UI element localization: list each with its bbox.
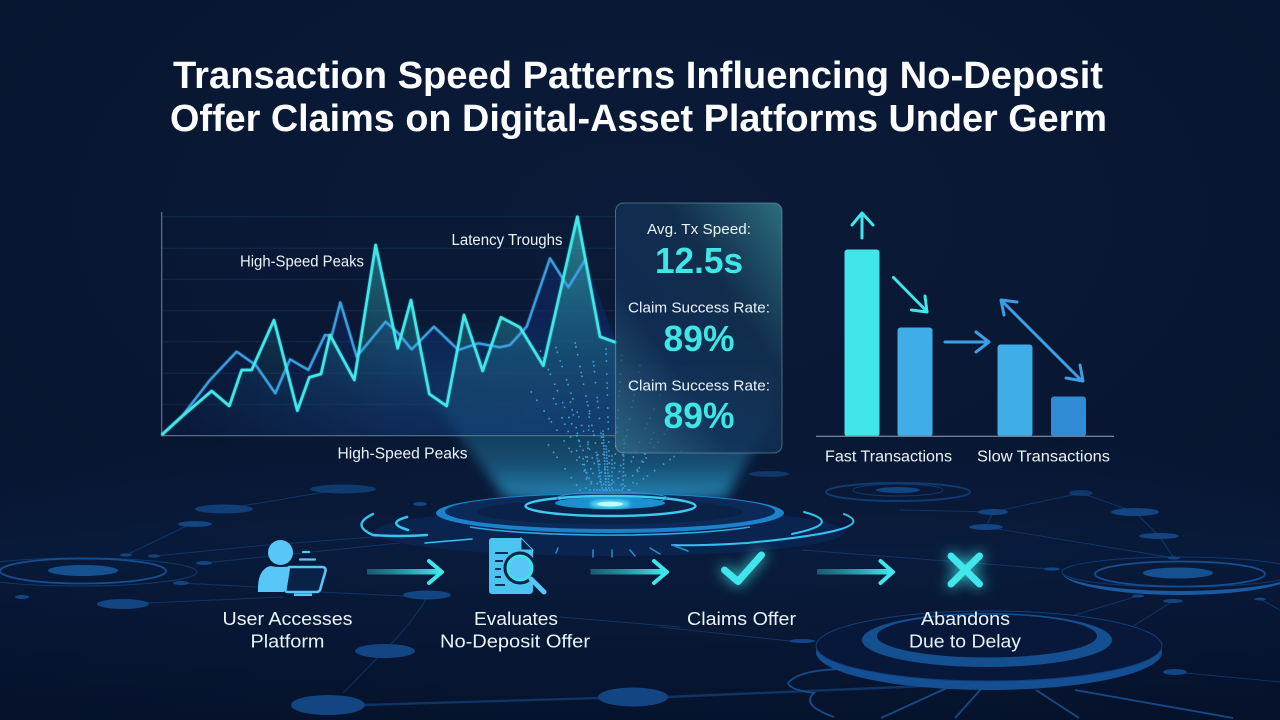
stat: claim success rate: Claim Success Rate: xyxy=(628,300,770,317)
ring node: left xyxy=(0,558,200,594)
line chart: transaction speed xyxy=(162,212,617,462)
stat: claim success rate repeated: Claim Success Rate: xyxy=(628,378,770,395)
label: No-Deposit Offer xyxy=(440,632,590,652)
light cone from the hologram base xyxy=(405,310,775,504)
arrow: right xyxy=(945,332,989,352)
label: latency troughs: Latency Troughs xyxy=(452,232,563,249)
stat: claim success rate xyxy=(628,300,770,359)
title: Transaction Speed Patterns Influencing No-Deposit xyxy=(173,55,1103,97)
arrow: double diagonal xyxy=(1001,300,1083,381)
bar: slow 2 xyxy=(1051,396,1086,436)
flow step 2: evaluates no-deposit offer xyxy=(440,538,590,652)
label xyxy=(222,609,352,652)
label: Due to Delay xyxy=(909,632,1021,652)
stat: claim success rate repeated xyxy=(628,378,770,436)
ring node: upper right xyxy=(826,483,970,501)
large disk platform, bottom right xyxy=(816,611,1162,690)
flow step 3: claims offer xyxy=(687,555,796,629)
stats panel xyxy=(616,203,782,453)
label: Evaluates xyxy=(474,609,558,629)
bar chart: fast vs slow transactions xyxy=(816,213,1114,466)
label: Claims Offer xyxy=(687,609,796,629)
stat: average transaction speed xyxy=(647,221,751,281)
label xyxy=(440,609,590,652)
label: Platform xyxy=(250,632,324,652)
label: slow transactions: Slow Transactions xyxy=(977,449,1110,466)
arrow: up xyxy=(852,213,873,238)
series: blue line xyxy=(162,258,585,435)
label: Abandons xyxy=(921,609,1010,629)
icon: user with tablet xyxy=(258,540,326,596)
ring node: right xyxy=(1062,557,1280,595)
arrow: step 3 to 4 xyxy=(817,561,893,583)
hologram base disk xyxy=(362,492,853,557)
stat: claim success rate repeated: 89% xyxy=(664,395,734,436)
label: high-speed peaks: High-Speed Peaks xyxy=(240,254,364,271)
label xyxy=(909,609,1021,652)
arrow: diagonal down xyxy=(894,278,927,312)
bar: fast 1 xyxy=(844,250,880,436)
axis label: High-Speed Peaks xyxy=(338,446,468,462)
stat: claim success rate: 89% xyxy=(664,318,734,359)
particles rising from base xyxy=(530,342,690,490)
flow step 1: user accesses platform xyxy=(222,540,352,652)
stat: average transaction speed: Avg. Tx Speed: xyxy=(647,221,751,238)
series: cyan line xyxy=(162,217,617,435)
network of nodes xyxy=(15,471,1280,718)
bar: slow 1 xyxy=(998,344,1032,436)
title: Offer Claims on Digital-Asset Platforms Under Germ xyxy=(170,98,1107,140)
label: fast transactions: Fast Transactions xyxy=(825,449,952,466)
icon: cross mark xyxy=(951,556,980,584)
arrow: step 2 to 3 xyxy=(590,561,667,583)
title xyxy=(170,55,1107,140)
bar: fast 2 xyxy=(898,328,932,436)
arrow: step 1 to 2 xyxy=(367,561,442,583)
stat: average transaction speed: 12.5s xyxy=(655,240,743,281)
label: User Accesses xyxy=(222,609,352,629)
icon: check mark xyxy=(724,555,762,582)
arcs around the base xyxy=(362,512,853,557)
flow step 4: abandons due to delay xyxy=(909,556,1021,652)
icon: document with magnifier xyxy=(489,538,544,594)
